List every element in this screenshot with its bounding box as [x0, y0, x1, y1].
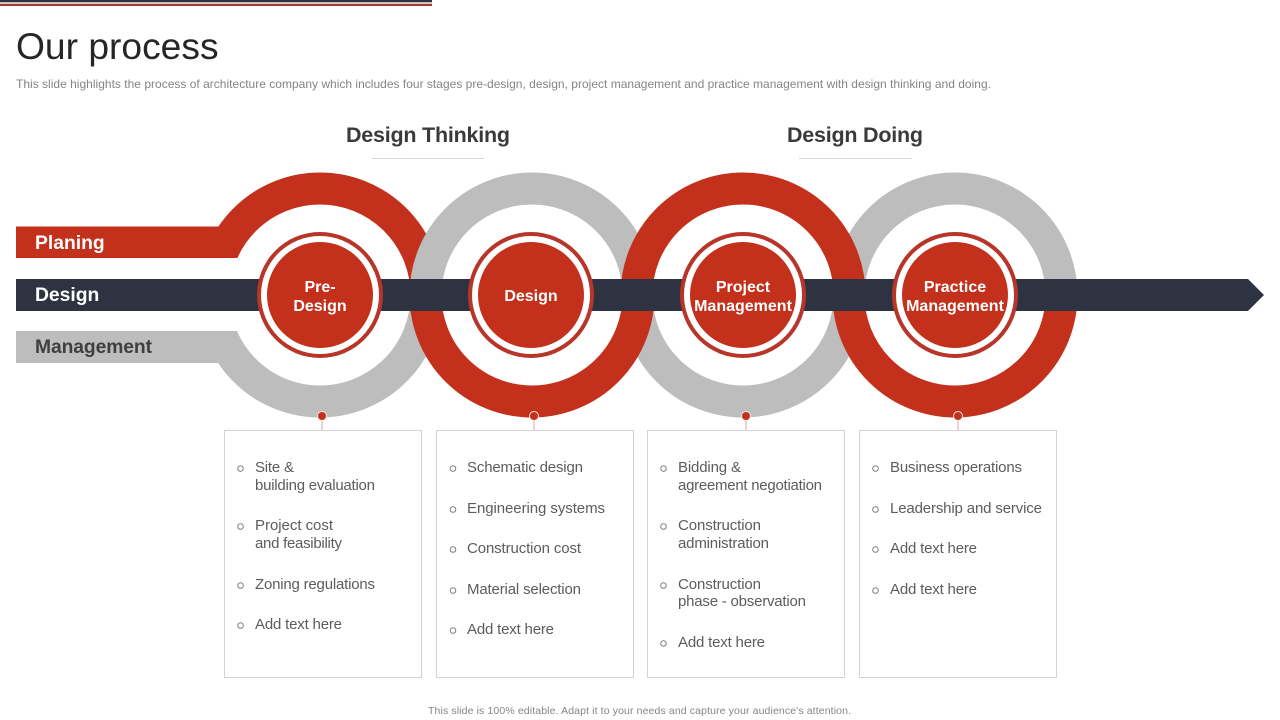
panel: Practice Management list — [860, 412, 1056, 678]
stage: Practice Management — [892, 232, 1018, 358]
list items: Business operations — [890, 459, 1022, 476]
label: Design: Design — [35, 285, 99, 306]
panel: Project Management list — [648, 412, 844, 678]
heading: Design Doing: Design Doing — [787, 123, 923, 147]
stage: Project Management: Management — [694, 298, 793, 315]
list items: phase - observation — [678, 593, 806, 610]
list items — [661, 459, 822, 651]
list items: Material selection — [467, 581, 581, 598]
stage: Project Management: Project — [716, 279, 771, 296]
list items: Add text here — [890, 581, 977, 598]
subtitle: This slide highlights the process of architecture company which includes four stages pre-design, design, project management and practice management with design thinking and doing. — [16, 77, 991, 91]
list items: Project cost — [255, 517, 334, 534]
list items: agreement negotiation — [678, 477, 822, 494]
label: Planing: Planing — [35, 233, 105, 254]
list items: Construction cost — [467, 540, 582, 557]
list items: Leadership and service — [890, 500, 1042, 517]
list items — [450, 459, 605, 638]
stage: Pre-Design: Pre- — [304, 279, 336, 296]
list items: Construction — [678, 517, 761, 534]
stage: Practice Management: Management — [906, 298, 1005, 315]
ring 3 lower arc — [638, 311, 849, 418]
stage: Pre-Design: Design — [293, 298, 347, 315]
heading: Design Thinking: Design Thinking — [346, 123, 510, 147]
list items: Add text here — [890, 540, 977, 557]
footer note: This slide is 100% editable. Adapt it to your needs and capture your audience's attention. — [428, 705, 851, 717]
heading: Design Doing — [787, 123, 923, 158]
stage: Project Management — [680, 232, 806, 358]
ring 2 upper arc — [410, 172, 638, 279]
ring 4 lower arc — [834, 311, 1076, 418]
stage: Pre-Design — [257, 232, 383, 358]
ring 1 with planing and management bands — [16, 188, 426, 402]
list items: Schematic design — [467, 459, 583, 476]
stage: Practice Management: Practice — [924, 279, 986, 296]
list items: Zoning regulations — [255, 576, 375, 593]
title: Our process — [16, 25, 219, 67]
list items: Bidding & — [678, 459, 741, 476]
list items — [238, 459, 375, 633]
list items: Engineering systems — [467, 500, 605, 517]
list items: building evaluation — [255, 477, 375, 494]
list items: Add text here — [255, 616, 342, 633]
list items: Add text here — [678, 634, 765, 651]
list items — [873, 459, 1042, 598]
list items: and feasibility — [255, 535, 342, 552]
ring 2 lower arc — [410, 311, 654, 418]
list items: Site & — [255, 459, 294, 476]
stage: Design: Design — [504, 288, 558, 305]
list items: administration — [678, 535, 769, 552]
ring 4 upper arc — [849, 172, 1076, 279]
panel: Pre-Design list — [224, 412, 422, 678]
label: Management: Management — [35, 337, 153, 358]
top accent lines — [0, 0, 432, 6]
list items: Construction — [678, 576, 761, 593]
panel: Design list — [436, 412, 634, 678]
list items: Add text here — [467, 621, 554, 638]
ring 3 upper arc — [622, 172, 864, 279]
design arrow band — [16, 279, 1264, 311]
stage: Design — [468, 232, 594, 358]
